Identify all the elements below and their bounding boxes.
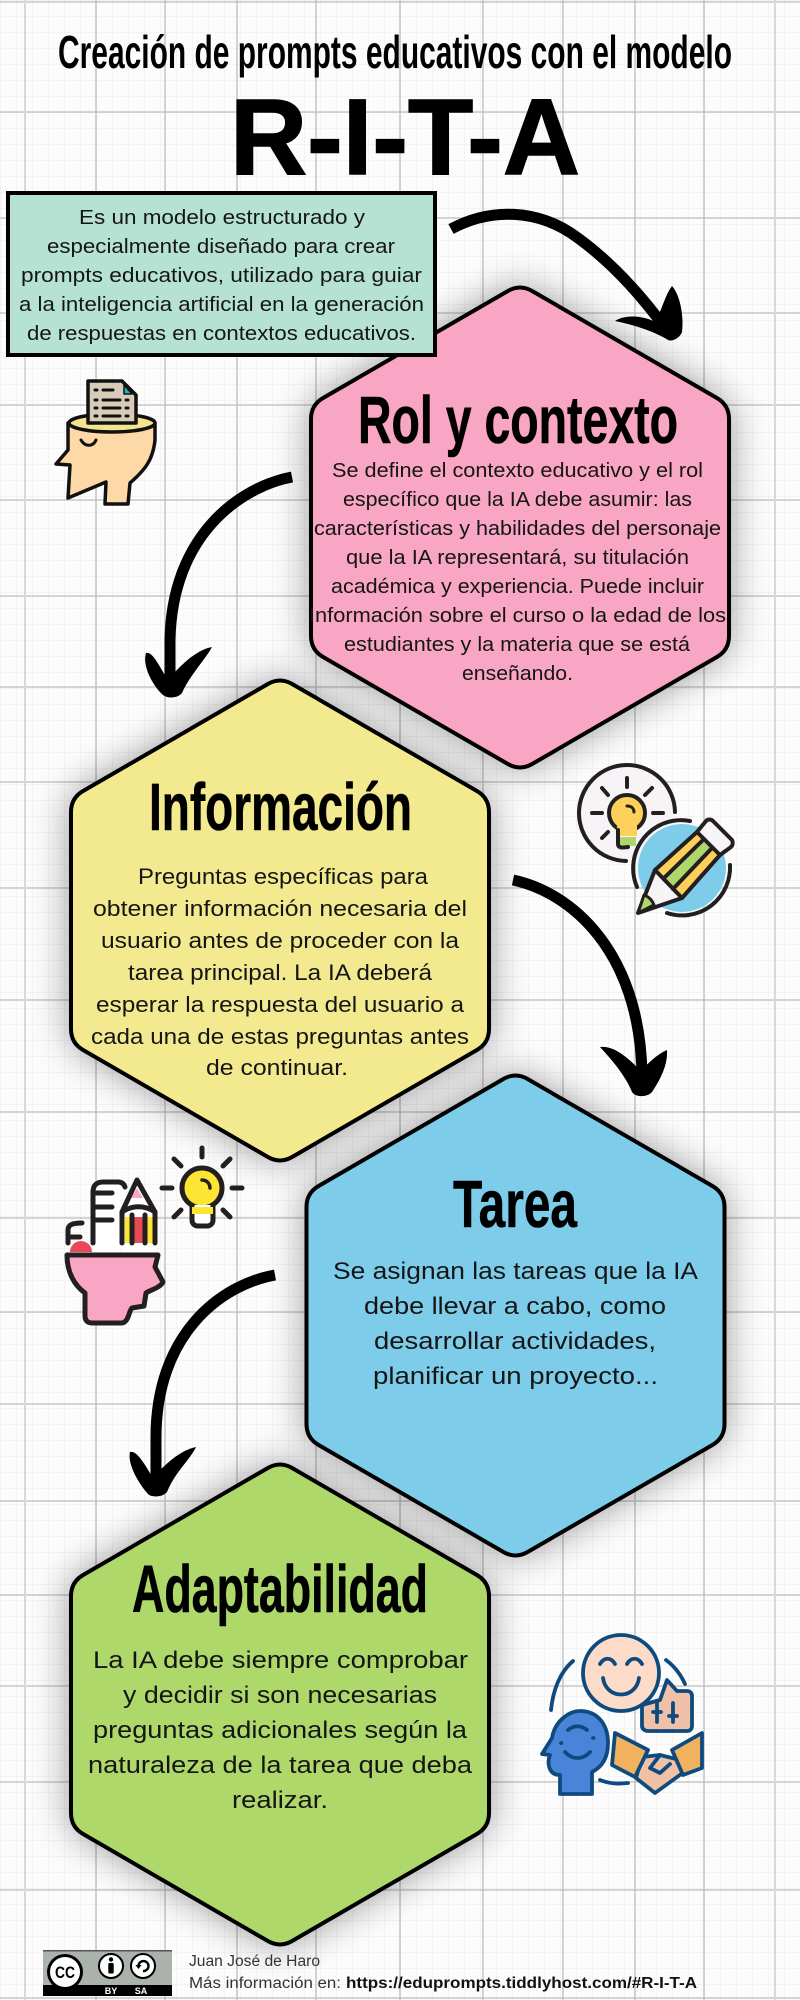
body text: Rol y contexto: específico que la IA debe asumir: las <box>343 488 692 511</box>
body text: Rol y contexto <box>309 459 726 685</box>
license badge: CC BY-SA: BY <box>105 1986 117 1996</box>
footer credits: https://eduprompts.tiddlyhost.com/#R-I-T-A <box>346 1975 697 1992</box>
body text: Tarea: Se asignan las tareas que la IA <box>333 1258 698 1285</box>
body text: Información: usuario antes de proceder con la <box>101 928 460 953</box>
icon: light bulb and pencil <box>579 765 733 915</box>
body text: Adaptabilidad: La IA debe siempre comprobar <box>93 1647 468 1674</box>
body text: Rol y contexto: características y habilidades del personaje <box>314 517 721 540</box>
body text: Adaptabilidad: preguntas adicionales según la <box>93 1717 468 1744</box>
body text: Información: de continuar. <box>206 1055 348 1080</box>
blue hexagon <box>306 1076 724 1556</box>
body text: Rol y contexto: que la IA representará, su titulación <box>346 546 689 569</box>
body text: Rol y contexto: Información sobre el curso o la edad de los <box>309 604 726 627</box>
arrow: Información to Tarea <box>513 880 667 1096</box>
panel: Adaptabilidad <box>71 1464 489 1944</box>
footer credits: Juan José de Haro <box>189 1953 320 1970</box>
body text: Rol y contexto: estudiantes y la materia que se está <box>344 633 691 656</box>
footer credits: Más información en: <box>189 1975 341 1992</box>
body text: Información: obtener información necesaria del <box>93 896 467 921</box>
intro text box: de respuestas en contextos educativos. <box>27 322 416 345</box>
body text: Información: tarea principal. La IA deberá <box>128 960 433 985</box>
body text: Información: Preguntas específicas para <box>138 864 429 889</box>
license badge: CC BY-SA: CC <box>55 1963 75 1982</box>
arrow: intro to Rol y contexto <box>451 214 683 341</box>
body text: Tarea <box>333 1258 698 1390</box>
yellow hexagon <box>71 680 489 1160</box>
intro text box: Es un modelo estructurado y <box>79 206 366 229</box>
body text: Tarea: debe llevar a cabo, como <box>364 1293 666 1320</box>
body text: Rol y contexto: Se define el contexto educativo y el rol <box>332 459 703 482</box>
intro text box: prompts educativos, utilizado para guiar <box>21 264 422 287</box>
heading: Tarea: Tarea <box>453 1167 578 1242</box>
body text: Adaptabilidad: y decidir si son necesarias <box>123 1682 437 1709</box>
icon: head with document <box>56 381 155 504</box>
panel: Tarea <box>306 1076 724 1556</box>
body text: Información: esperar la respuesta del usuario a <box>96 992 465 1017</box>
intro text box: a la inteligencia artificial en la generación <box>19 293 424 316</box>
arrow: Tarea to Adaptabilidad <box>130 1275 275 1496</box>
body text: Información <box>91 864 469 1080</box>
body text: Rol y contexto: enseñando. <box>462 662 573 685</box>
body text: Tarea: desarrollar actividades, <box>374 1328 656 1355</box>
body text: Rol y contexto: académica y experiencia. Puede incluir <box>331 575 704 598</box>
heading: Adaptabilidad: Adaptabilidad <box>132 1552 428 1627</box>
license badge: CC BY-SA <box>43 1950 172 1996</box>
icon: head with ruler, pencil and bulb <box>67 1148 242 1323</box>
body text: Información: cada una de estas preguntas antes <box>91 1024 469 1049</box>
intro text box: especialmente diseñado para crear <box>47 235 395 258</box>
body text: Adaptabilidad: naturaleza de la tarea que deba <box>88 1752 473 1779</box>
body text: Tarea: planificar un proyecto... <box>373 1363 658 1390</box>
panel: Información <box>71 680 489 1160</box>
heading: R-I-T-A: R-I-T-A <box>230 76 580 197</box>
pink hexagon <box>311 288 729 768</box>
panel: Rol y contexto <box>309 288 729 768</box>
footer credits <box>189 1953 697 1992</box>
intro text box <box>8 193 435 355</box>
arrow: Rol y contexto to Información <box>145 477 292 697</box>
green hexagon <box>71 1464 489 1944</box>
body text: Adaptabilidad <box>88 1647 473 1814</box>
license badge: CC BY-SA: SA <box>135 1986 148 1996</box>
body text: Adaptabilidad: realizar. <box>232 1787 328 1814</box>
icon: handshake, smile and head <box>542 1635 702 1794</box>
heading: Información: Información <box>149 770 412 845</box>
